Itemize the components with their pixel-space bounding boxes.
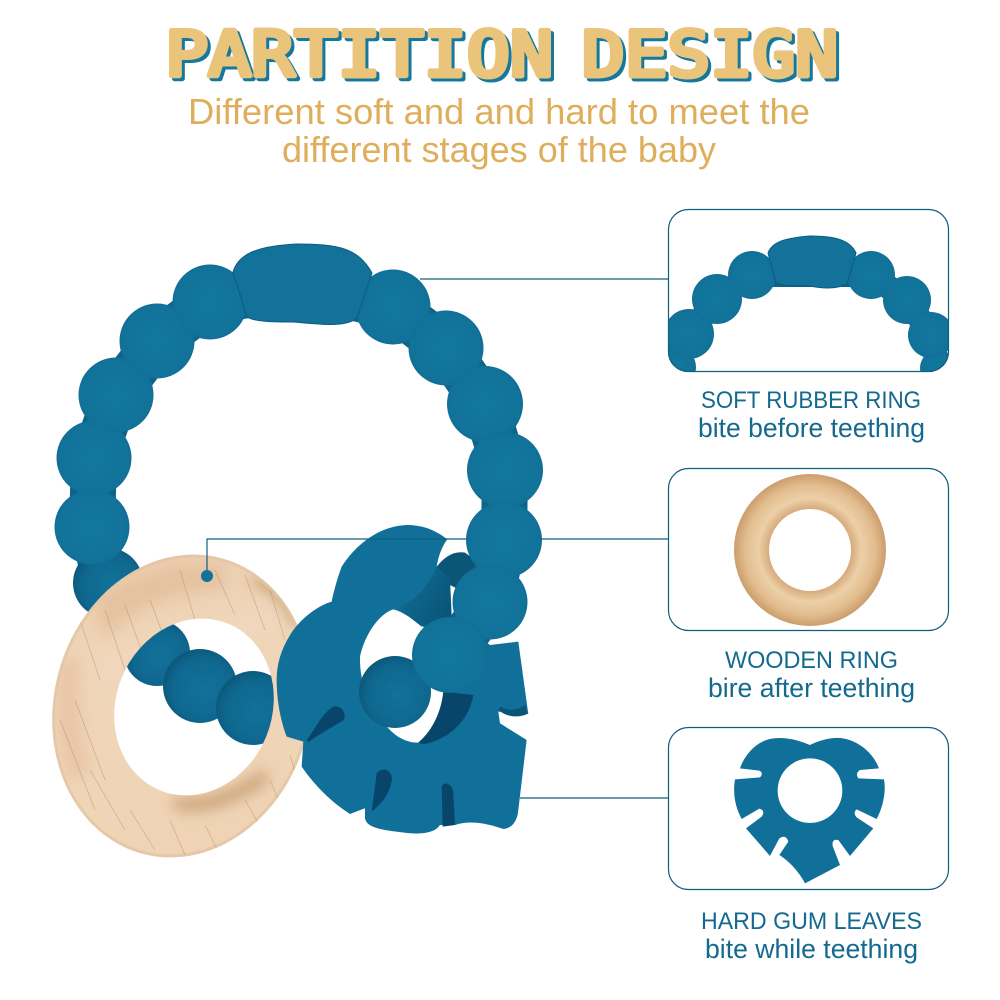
title: PARTITION [165,18,553,91]
leader line: soft rubber ring [420,278,668,280]
label: hard gum leaves [701,908,922,964]
title: DESIGN [582,18,838,91]
title: DESIGN [585,21,841,94]
label: soft rubber ring: SOFT RUBBER RING [701,387,921,414]
label: wooden ring: bire after teething [708,673,915,703]
subtitle: Different soft and and hard to meet the [188,91,810,132]
panel: wooden ring [668,468,948,630]
front beads [359,502,542,728]
gum leaf teether [277,525,528,833]
silicone bead ring back section [54,244,543,745]
subtitle: different stages of the baby [282,129,716,170]
label: hard gum leaves: HARD GUM LEAVES [701,908,922,935]
label: wooden ring [708,647,915,703]
leader line with dot: wooden ring [201,539,668,582]
label: soft rubber ring [698,387,925,443]
leader line: hard gum leaves [520,797,668,799]
teether product illustration [20,244,668,886]
title: PARTITION [168,21,556,94]
label: hard gum leaves: bite while teething [705,934,918,964]
label: soft rubber ring: bite before teething [698,413,925,443]
title [165,18,841,94]
panel: hard gum leaves [668,728,948,890]
subtitle [188,91,810,170]
wooden ring [52,554,304,858]
label: wooden ring: WOODEN RING [725,647,898,674]
icon: leaf teether [734,738,885,883]
panel: soft rubber ring [668,208,950,372]
